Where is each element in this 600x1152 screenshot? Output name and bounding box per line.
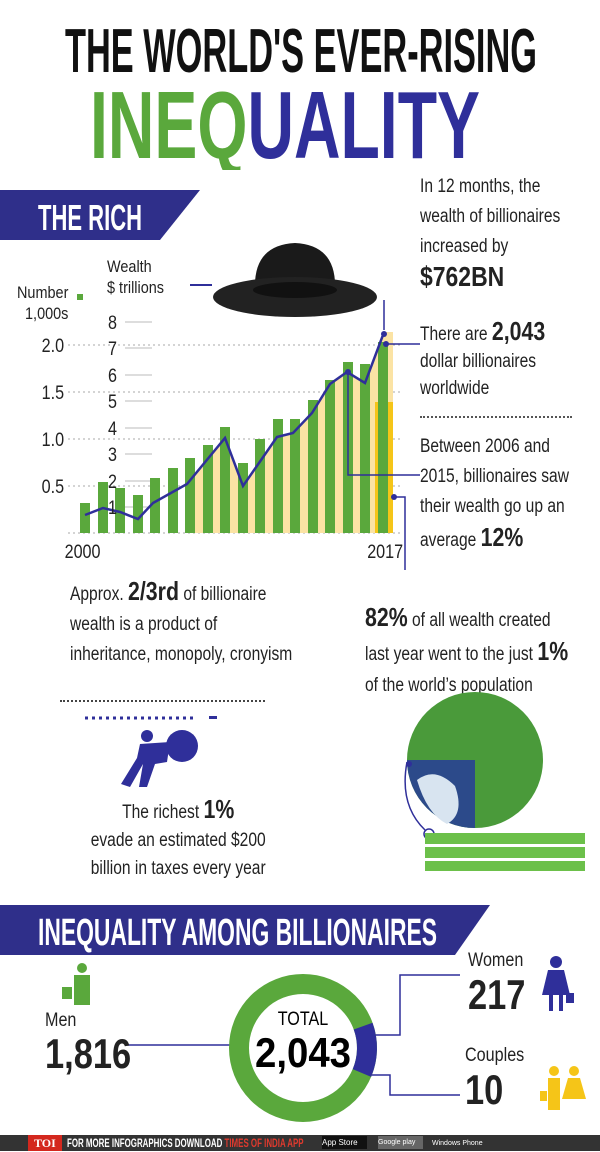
bar chart: 4 [108,418,117,439]
bar chart: 0.5 [42,476,64,497]
callout: 762BN: $762BN [420,261,504,292]
callout: 12%: Between 2006 and [420,436,550,457]
footer bar [0,1135,600,1151]
couples label [465,1045,524,1113]
bar chart: 6 [108,365,117,386]
bar chart: 1.5 [42,382,64,403]
callout: 2043 billionaires: worldwide [420,378,489,399]
bar chart: 2.0 [42,335,64,356]
couples label: Couples [465,1045,524,1066]
callout: 12% [420,436,569,552]
chart legend: 1,000s [25,304,68,323]
callout: 12%: 2015, billionaires saw [420,466,569,487]
divider [420,416,572,418]
bar chart: 2017 [367,541,403,562]
donut chart [229,974,377,1122]
bar chart: 1 [108,497,117,518]
men label: 1,816 [45,1030,131,1077]
callout: 762BN: In 12 months, the [420,176,540,197]
callout: richest 1%: billion in taxes every year [91,858,266,879]
callout: 762BN [420,176,560,292]
callout: 82%: of the world’s population [365,675,533,696]
chart legend: Number [17,283,68,302]
callout: richest 1%: The richest 1% [122,794,234,824]
bar chart: 8 [108,312,117,333]
callout: 82%: last year went to the just 1% [365,636,568,666]
bar chart: 1.0 [42,429,64,450]
callout: 2043 billionaires [420,316,545,399]
footer bar: Google play [378,1139,415,1146]
callout: 12%: average 12% [420,522,523,552]
icon: woman [542,956,574,1011]
chart legend: Wealth [107,257,152,276]
connector lines [126,974,460,1096]
callout: 762BN: increased by [420,236,508,257]
chart legend: $ trillions [107,278,164,297]
bar chart: 7 [108,338,117,359]
icon: couple [540,1066,586,1110]
footer bar: Windows Phone [432,1140,483,1147]
divider dotted [60,700,265,702]
women label: Women [468,950,523,971]
callout: 762BN: wealth of billionaires [420,206,560,227]
callout: richest 1% [91,794,266,879]
bar chart: 2000 [65,541,101,562]
icon: man carrying sack [85,716,217,787]
callout: 12%: their wealth go up an [420,496,565,517]
callout: 2/3rd [70,576,292,665]
callout: 2/3rd: wealth is a product of [70,614,217,635]
bar chart: 3 [108,444,117,465]
men label: Men [45,1010,76,1031]
bar chart [42,300,420,570]
callout: 2/3rd: inheritance, monopoly, cronyism [70,644,292,665]
callout: 2043 billionaires: dollar billionaires [420,351,536,372]
donut chart: TOTAL [278,1008,328,1029]
bar chart: 5 [108,391,117,412]
callout: richest 1%: evade an estimated $200 [91,830,266,851]
couples label: 10 [465,1066,503,1113]
footer bar: TOI [34,1136,56,1150]
footer bar: FOR MORE INFOGRAPHICS DOWNLOAD TIMES OF INDIA APP [67,1136,304,1150]
footer bar: App Store [322,1138,358,1147]
callout: 2/3rd: Approx. 2/3rd of billionaire [70,576,266,606]
callout: 82%: 82% of all wealth created [365,602,551,632]
callout: 2043 billionaires: There are 2,043 [420,316,545,346]
icon: hat [213,243,377,317]
icon: globe [404,692,585,871]
donut chart: 2,043 [255,1029,351,1076]
icon: man [62,963,90,1005]
chart legend [17,257,212,323]
banner: the rich [0,190,200,240]
bar chart: 2 [108,471,117,492]
women label: 217 [468,971,525,1018]
callout: 82% [365,602,568,696]
women label [468,950,525,1018]
